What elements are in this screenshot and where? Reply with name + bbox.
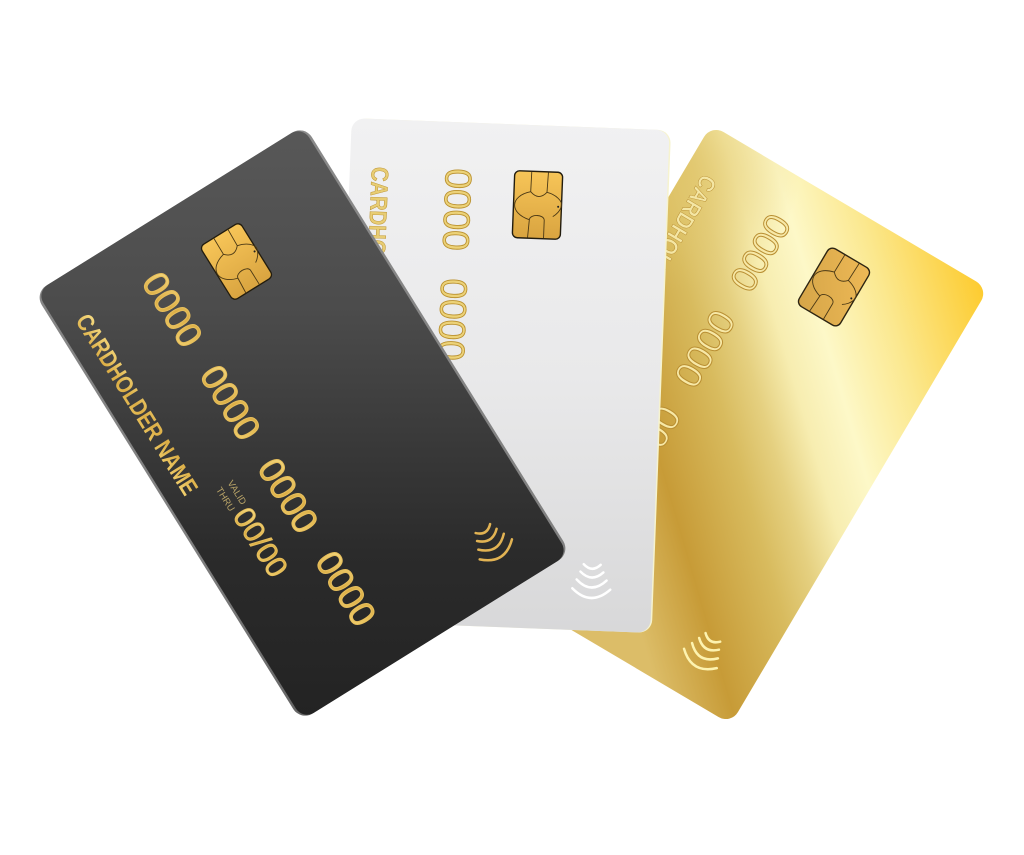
- black card expiry date: 00/00: [226, 502, 294, 583]
- gold card number group 3: 0000: [612, 398, 689, 490]
- white card: [332, 118, 671, 633]
- black card number group 1: 0000: [134, 265, 211, 354]
- gold card number group 1: 0000: [722, 207, 799, 299]
- black card number group 3: 0000: [250, 451, 327, 540]
- black card: [34, 125, 571, 721]
- icon: gold card chip: [796, 246, 872, 328]
- gold card cardholder name: CARDHOLDER NAME: [592, 170, 721, 363]
- black card number group 2: 0000: [192, 358, 269, 447]
- white card rim: [334, 118, 671, 633]
- white card cardholder name: CARDHOLDER NAME: [358, 166, 393, 375]
- black card number group 4: 0000: [308, 544, 385, 633]
- icon: black card chip: [200, 222, 274, 301]
- icon: white card chip: [512, 171, 563, 239]
- icon: gold card contactless: [679, 628, 729, 676]
- white card body: [332, 118, 670, 633]
- gold card body: [454, 125, 988, 724]
- black card valid label: VALID: [225, 479, 248, 507]
- black card body: [36, 126, 569, 720]
- gold card number group 2: 0000: [666, 303, 743, 395]
- icon: white card contactless: [572, 564, 611, 599]
- black card thru label: THRU: [213, 485, 237, 514]
- gold card top-left shading: [454, 125, 988, 724]
- icon: black card contactless: [467, 518, 517, 567]
- white card number group 1: 0000: [435, 168, 479, 252]
- gold card: [454, 125, 988, 724]
- white card number group 2: 0000: [430, 278, 474, 362]
- black card cardholder name: CARDHOLDER NAME: [70, 309, 203, 500]
- black card edge: [34, 125, 571, 721]
